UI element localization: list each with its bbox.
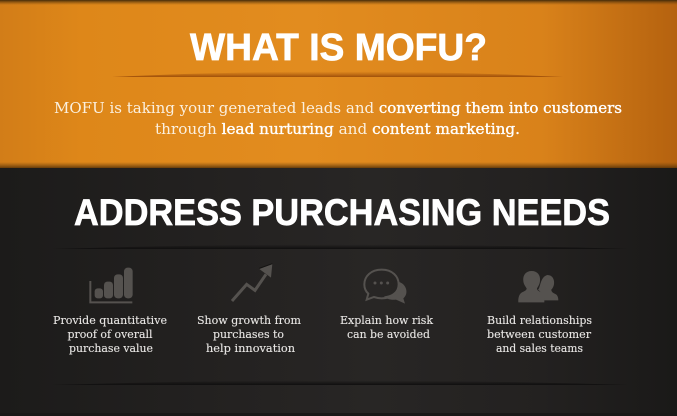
caption: explain risk [340, 313, 434, 341]
caption: build relationships: and sales teams [496, 341, 583, 355]
text block: MOFU definition: MOFU is taking your generated leads and converting them into customers [54, 101, 622, 117]
heading: address purchasing needs: ADDRESS PURCHASING NEEDS [74, 192, 610, 233]
icon: bar chart [89, 268, 133, 303]
caption: quantitative proof [53, 313, 167, 355]
column: quantitative proof [53, 268, 167, 355]
caption: show growth: purchases to [213, 327, 284, 341]
icon: growth arrow [232, 264, 272, 301]
caption: show growth [197, 313, 301, 355]
caption: build relationships: between customer [487, 327, 591, 341]
caption: build relationships: Build relationships [487, 313, 592, 327]
caption: quantitative proof: proof of overall [68, 327, 153, 341]
icon: people [518, 271, 558, 302]
column: explain risk [340, 270, 434, 341]
text block: MOFU definition: through lead nurturing and content marketing. [155, 122, 520, 138]
caption: build relationships [487, 313, 592, 355]
caption: show growth: Show growth from [197, 313, 301, 327]
text block: MOFU definition [54, 101, 622, 138]
caption: quantitative proof: purchase value [69, 341, 153, 355]
caption: explain risk: Explain how risk [340, 313, 434, 327]
caption: quantitative proof: Provide quantitative [53, 313, 167, 327]
panel: address purchasing needs [0, 168, 677, 416]
title: what is MOFU: WHAT IS MOFU? [190, 27, 487, 69]
panel: what is MOFU [0, 0, 677, 168]
column: build relationships [487, 271, 592, 355]
icon: speech bubbles [364, 270, 406, 304]
caption: show growth: help innovation [206, 341, 296, 355]
column: show growth [197, 264, 301, 355]
caption: explain risk: can be avoided [347, 327, 431, 341]
